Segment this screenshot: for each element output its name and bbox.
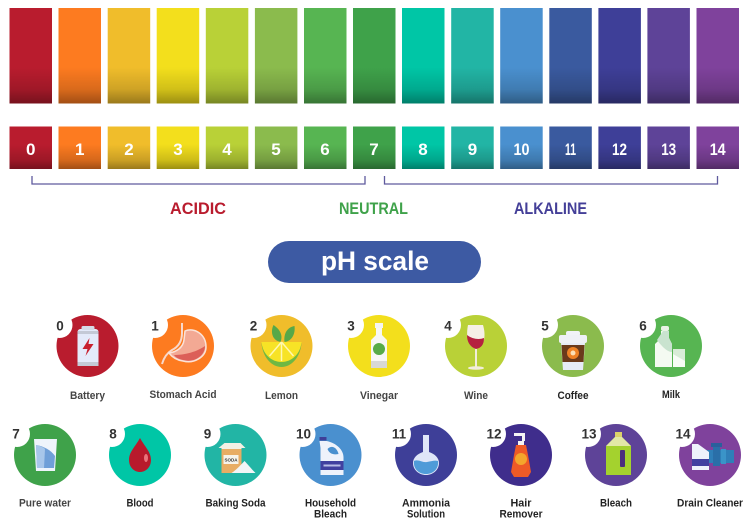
icon: milk bottle and glass — [655, 326, 685, 367]
label: acidic: ACIDIC — [170, 200, 226, 218]
item: ammonia solution, pH 11: 11 — [392, 426, 407, 442]
icon: coffee cup — [559, 331, 587, 370]
icon: battery — [78, 326, 98, 366]
item: milk, pH 6: Milk — [662, 389, 681, 401]
icon: bleach bottle — [606, 432, 631, 475]
item: coffee, pH 5 — [532, 312, 604, 402]
icon: bleach jug — [320, 437, 344, 475]
item: vinegar, pH 3: Vinegar — [360, 390, 399, 402]
item: household bleach, pH 10: Bleach — [314, 508, 347, 520]
item: stomach acid, pH 1: 1 — [151, 318, 159, 334]
icon: wine glass — [467, 325, 485, 370]
numbered pH swatches: 11 — [565, 140, 576, 159]
numbered pH swatches: 4 — [222, 140, 232, 159]
numbered pH swatches: 12 — [612, 140, 627, 159]
item: milk, pH 6 — [630, 312, 702, 401]
numbered pH swatches: 3 — [173, 140, 183, 159]
item: stomach acid, pH 1: Stomach Acid — [150, 389, 216, 401]
item: bleach, pH 13: Bleach — [600, 498, 632, 510]
numbered pH swatches: 0 — [26, 140, 35, 159]
item: pure water, pH 7 — [4, 421, 76, 510]
item: lemon, pH 2: Lemon — [265, 390, 298, 402]
item: pure water, pH 7: 7 — [12, 426, 20, 442]
icon: stomach — [162, 323, 206, 364]
colour bars: tall swatches — [10, 8, 739, 104]
item: ammonia solution, pH 11: Solution — [407, 508, 445, 520]
icon: pump bottle — [511, 433, 531, 477]
item: blood, pH 8 — [99, 421, 171, 510]
item: wine, pH 4 — [435, 312, 507, 402]
item: baking soda, pH 9: 9 — [204, 426, 211, 442]
item: blood, pH 8: 8 — [109, 426, 117, 442]
bracket: alkaline range — [384, 176, 718, 184]
title pill: pH scale — [268, 241, 481, 283]
numbered pH swatches: 7 — [369, 140, 379, 159]
item: milk, pH 6: 6 — [639, 318, 647, 334]
item: lemon, pH 2: 2 — [250, 318, 257, 334]
label: neutral: NEUTRAL — [339, 200, 408, 218]
icon: drain cleaner and pipe — [692, 443, 734, 470]
icon: flask — [413, 435, 439, 475]
numbered pH swatches: 6 — [320, 140, 330, 159]
item: battery, pH 0 — [46, 312, 118, 402]
item: wine, pH 4: Wine — [464, 390, 488, 402]
item: drain cleaner, pH 14: Drain Cleaner — [677, 498, 744, 510]
item: household bleach, pH 10: Household — [305, 498, 356, 510]
item: ammonia solution, pH 11 — [385, 421, 457, 520]
numbered pH swatches: 9 — [468, 140, 477, 159]
numbered pH swatches: 13 — [661, 140, 676, 159]
numbered pH swatches: 1 — [75, 140, 84, 159]
item: blood, pH 8: Blood — [126, 498, 154, 510]
icon: lemon — [262, 325, 302, 367]
item: coffee, pH 5: Coffee — [558, 390, 588, 402]
title pill: pH scale: pH scale — [321, 246, 429, 276]
numbered pH swatches: 14 — [710, 140, 726, 159]
icon: blood drop — [129, 438, 151, 472]
numbered pH swatches: 8 — [418, 140, 428, 159]
item: drain cleaner, pH 14 — [669, 421, 744, 510]
item: household bleach, pH 10 — [290, 421, 362, 520]
item: bleach, pH 13 — [575, 421, 647, 510]
item: hair remover, pH 12 — [480, 421, 552, 520]
label: alkaline: ALKALINE — [514, 200, 587, 218]
icon: water glass — [34, 439, 57, 471]
item: hair remover, pH 12: 12 — [486, 426, 502, 442]
item: household bleach, pH 10: 10 — [296, 426, 311, 442]
icon: baking soda box: SODA — [224, 458, 238, 462]
item: pure water, pH 7: Pure water — [19, 498, 72, 510]
item: vinegar, pH 3 — [338, 312, 410, 402]
item: bleach, pH 13: 13 — [581, 426, 597, 442]
item: battery, pH 0: Battery — [70, 390, 106, 402]
item: baking soda, pH 9: Baking Soda — [206, 498, 266, 510]
item: vinegar, pH 3: 3 — [347, 318, 355, 334]
numbered pH swatches: 5 — [271, 140, 281, 159]
item: battery, pH 0: 0 — [56, 318, 64, 334]
numbered pH swatches — [10, 126, 739, 169]
item: baking soda, pH 9 — [194, 421, 266, 510]
item: stomach acid, pH 1 — [142, 312, 216, 401]
item: lemon, pH 2 — [240, 312, 312, 402]
item: wine, pH 4: 4 — [444, 318, 452, 334]
item: hair remover, pH 12: Hair — [510, 498, 532, 510]
item: drain cleaner, pH 14: 14 — [675, 426, 691, 442]
numbered pH swatches: 10 — [514, 140, 530, 159]
item: hair remover, pH 12: Remover — [500, 508, 543, 520]
bracket: acidic range — [32, 176, 365, 184]
icon: vinegar bottle — [371, 323, 387, 368]
numbered pH swatches: 2 — [124, 140, 134, 159]
item: coffee, pH 5: 5 — [541, 318, 549, 334]
item: ammonia solution, pH 11: Ammonia — [402, 498, 451, 510]
